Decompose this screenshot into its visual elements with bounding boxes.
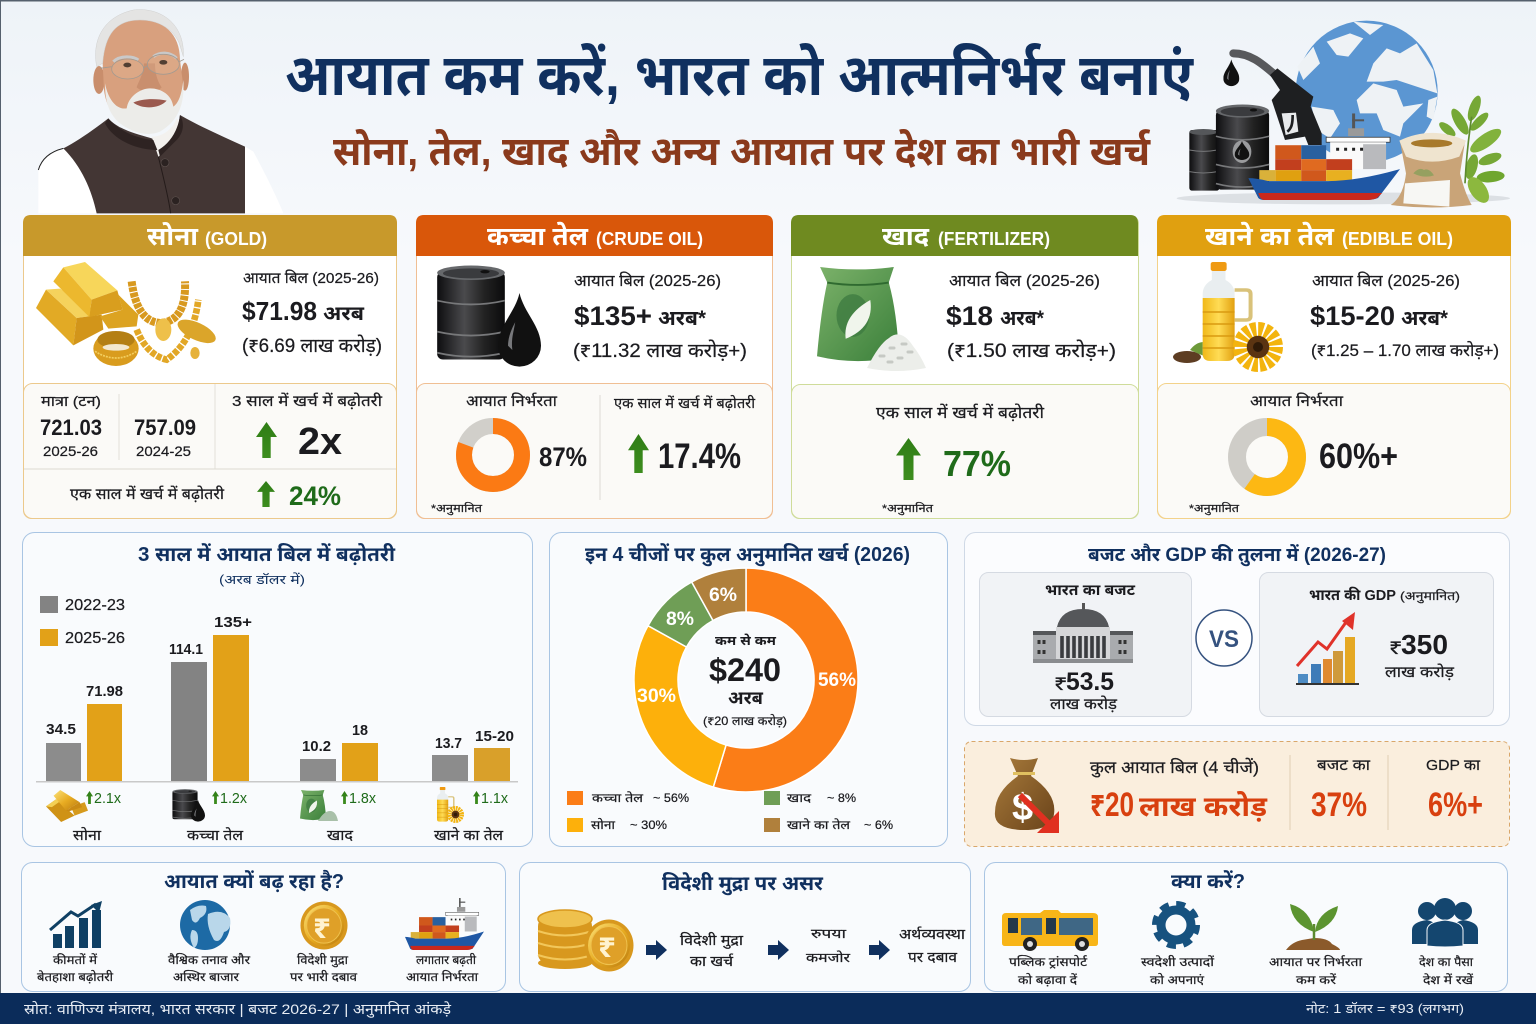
bar value labels: 15-20 [475, 728, 514, 745]
icon: money bag with down arrow: $ [1012, 787, 1033, 829]
panel: crude oil: कच्चा तेल [487, 221, 589, 251]
category names: खाद [327, 827, 354, 843]
budget box: भारत का बजट [1045, 582, 1136, 599]
panel: fertilizer: खाद [882, 221, 929, 251]
gold stats box: मात्रा (टन) [41, 393, 101, 409]
panel: gold [23, 215, 397, 518]
chart legend [40, 596, 125, 647]
action labels: को अपनाएं [1150, 972, 1204, 987]
edible stats box: आयात निर्भरता [1250, 392, 1344, 410]
donut percentages: 6% [709, 585, 737, 606]
panel: edible oil [1157, 215, 1511, 518]
reason labels: अस्थिर बाजार [173, 969, 240, 984]
chart: 60 percent donut [1237, 427, 1297, 487]
gold stats box: एक साल में खर्च में बढ़ोतरी [70, 485, 225, 503]
GDP box: भारत की GDP [1309, 586, 1396, 604]
panel: edible oil: खाने का तेल [1205, 221, 1335, 251]
import bill figures [946, 272, 1116, 362]
reason labels: बेतहाशा बढ़ोतरी [37, 969, 114, 984]
reason labels [37, 952, 479, 984]
chart legend: 2025-26 [65, 630, 125, 647]
reason labels: कीमतों में [53, 953, 98, 967]
growth multiples: 1.2x [220, 790, 247, 807]
action labels: आयात पर निर्भरता [1269, 954, 1363, 969]
VS badge: VS [1209, 626, 1239, 653]
chart legend: 2022-23 [65, 597, 125, 614]
budget box [980, 572, 1192, 716]
budget box: लाख करोड़ [1050, 696, 1118, 713]
import bill figures: आयात बिल (2025-26) [243, 270, 379, 287]
import bill figures: (₹1.25 – 1.70 लाख करोड़+) [1311, 340, 1499, 360]
crude stats box: आयात निर्भरता [466, 392, 558, 410]
donut center total: कम से कम [715, 633, 777, 648]
text: rupee weakens [806, 926, 851, 965]
text: rupee weakens: रुपया [811, 926, 847, 941]
panel: why imports are rising: आयात क्यों बढ़ रहा है? [164, 869, 344, 893]
donut legend: ~ 30% [630, 818, 667, 832]
panel: foreign currency impact: विदेशी मुद्रा पर असर [662, 871, 824, 896]
text: foreign exchange cost: विदेशी मुद्रा [680, 931, 743, 950]
panel: total import bill callout: 37% [1311, 786, 1367, 824]
panel: budget versus GDP [964, 532, 1510, 726]
bars [36, 635, 518, 782]
panel: crude oil: (CRUDE OIL) [596, 229, 703, 249]
header illustration: globe, fuel nozzle, barrels, ship, sack [1177, 21, 1510, 207]
icon: oil barrel and drop [437, 266, 541, 367]
import bill figures: आयात बिल (2025-26) [574, 272, 721, 290]
panel: 3 year bar chart [22, 532, 532, 846]
reason labels: आयात निर्भरता [406, 969, 479, 984]
import bill figures: $18 [946, 301, 993, 331]
donut percentages: 30% [637, 686, 676, 707]
gold stats box: 24% [289, 481, 341, 511]
panel: what to do [984, 862, 1508, 992]
edible stats box [1158, 384, 1510, 518]
panel: total import bill callout: बजट का [1317, 757, 1371, 774]
gold stats box [24, 384, 396, 518]
import bill figures [573, 272, 747, 362]
icon: coin stack: ₹ [598, 929, 616, 964]
GDP box: लाख करोड़ [1385, 664, 1455, 681]
fertilizer stats box: *अनुमानित [882, 502, 934, 515]
footer bar: स्रोत: वाणिज्य मंत्रालय, भारत सरकार | बजट 2026-27 | अनुमानित आंकड़े [24, 1000, 452, 1019]
icon: rupee coin [300, 901, 348, 950]
import bill figures: अरब* [1000, 307, 1045, 330]
action labels: पब्लिक ट्रांसपोर्ट [1009, 954, 1088, 969]
chart: 87 percent donut [464, 426, 522, 484]
donut center total: अरब [728, 688, 764, 708]
panel: budget versus GDP: बजट और GDP की तुलना में (2026-27) [1088, 543, 1386, 567]
panel: total import bill callout [964, 742, 1510, 846]
arrow [768, 940, 789, 960]
fertilizer stats box [792, 384, 1138, 518]
icon: fertilizer sack [817, 267, 926, 371]
action labels: कम करें [1296, 973, 1337, 987]
donut legend: ~ 56% [653, 791, 689, 805]
donut legend: खाने का तेल [787, 817, 851, 832]
icon: growth chart [1296, 612, 1359, 685]
gold stats box: 3 साल में खर्च में बढ़ोतरी [232, 392, 383, 410]
import bill figures: $15-20 [1310, 301, 1395, 331]
donut percentages: 8% [666, 609, 694, 630]
gold stats box: 757.09 [134, 415, 196, 440]
reason labels: पर भारी दबाव [290, 969, 357, 984]
bar value labels: 34.5 [46, 721, 76, 738]
icon: sprout [1286, 904, 1340, 950]
fertilizer stats box: 77% [943, 443, 1011, 484]
panel: total import bill callout: लाख करोड़ [1139, 790, 1268, 822]
category names: सोना [73, 827, 101, 843]
GDP box [1260, 572, 1494, 716]
GDP box: 350 [1401, 629, 1448, 660]
donut percentages: 56% [818, 670, 856, 691]
reason labels: विदेशी मुद्रा [297, 952, 349, 968]
panel: total import bill callout: ₹20 [1090, 786, 1134, 824]
gold stats box: 2024-25 [136, 443, 191, 459]
crude stats box: 87% [539, 442, 587, 472]
import bill figures [1310, 272, 1499, 360]
panel: fertilizer: (FERTILIZER) [938, 229, 1050, 249]
text: foreign exchange cost: का खर्च [690, 953, 734, 969]
GDP box: (अनुमानित) [1400, 588, 1460, 604]
footer bar: नोट: 1 डॉलर = ₹93 (लगभग) [1306, 1001, 1464, 1016]
icon: people [1412, 898, 1478, 947]
panel: 3 year bar chart: (अरब डॉलर में) [219, 572, 305, 587]
import bill figures: अरब* [658, 307, 707, 330]
donut center total [703, 633, 787, 728]
bar value labels: 10.2 [302, 738, 331, 755]
import bill figures: अरब [323, 303, 365, 325]
chart: spend donut [634, 568, 858, 792]
reason labels: वैश्विक तनाव और [168, 952, 251, 967]
panel: gold: (GOLD) [205, 229, 267, 249]
icon: gear [1155, 904, 1197, 946]
VS badge [1196, 610, 1252, 666]
panel: crude oil [416, 215, 773, 518]
donut center total: (₹20 लाख करोड़) [703, 713, 787, 728]
bar value labels: 135+ [214, 614, 252, 631]
text: foreign exchange cost [680, 931, 743, 969]
crude stats box: *अनुमानित [431, 502, 483, 515]
reason labels: लगातार बढ़ती [416, 952, 477, 967]
import bill figures: (₹1.50 लाख करोड़+) [947, 340, 1116, 362]
arrow [869, 940, 890, 960]
panel: total spend donut [550, 532, 948, 846]
growth multiples: 1.1x [481, 790, 508, 807]
action labels: को बढ़ावा दें [1018, 972, 1078, 987]
donut legend: खाद [787, 791, 812, 805]
import bill figures: आयात बिल (2025-26) [949, 272, 1100, 290]
fertilizer stats box: एक साल में खर्च में बढ़ोतरी [876, 403, 1045, 422]
panel: edible oil: (EDIBLE OIL) [1342, 229, 1453, 249]
import bill figures: $135+ [574, 301, 652, 331]
icon: oil bottle and sunflower [1173, 262, 1276, 364]
category names: कच्चा तेल [187, 826, 244, 843]
import bill figures [242, 270, 382, 357]
category icons [46, 787, 461, 822]
gold stats box: 2x [298, 421, 342, 463]
crude stats box [416, 384, 772, 518]
icon: cargo ship [405, 898, 484, 950]
panel: fertilizer [791, 215, 1138, 518]
category names [73, 826, 504, 843]
action labels: देश का पैसा [1419, 954, 1474, 969]
icon: rising chart [50, 901, 102, 948]
category names: खाने का तेल [434, 826, 504, 843]
import bill figures: आयात बिल (2025-26) [1312, 272, 1460, 290]
donut legend [567, 790, 893, 832]
bar value labels: 114.1 [169, 641, 203, 658]
donut legend: ~ 8% [827, 791, 856, 805]
crude stats box: एक साल में खर्च में बढ़ोतरी [614, 395, 755, 411]
icon: money bag with down arrow [995, 758, 1059, 833]
growth multiples: 1.8x [349, 790, 376, 807]
GDP box: ₹ [1389, 637, 1402, 659]
action labels [1009, 954, 1474, 987]
panel: why imports are rising [22, 862, 506, 992]
import bill figures: $71.98 [242, 296, 317, 326]
edible stats box: *अनुमानित [1189, 502, 1240, 515]
footer bar [0, 993, 1536, 1024]
panel: total spend donut: इन 4 चीजों पर कुल अनुमानित खर्च (2026) [585, 542, 910, 567]
panel: foreign currency impact [520, 862, 970, 992]
panel: total import bill callout: कुल आयात बिल (4 चीजें) [1090, 757, 1259, 779]
icon: bus [1002, 910, 1098, 951]
header portrait illustration [38, 10, 283, 213]
bar value labels: 18 [352, 722, 368, 739]
crude stats box: 17.4% [658, 437, 741, 476]
icon: globe [180, 900, 230, 950]
edible stats box: 60%+ [1319, 437, 1398, 476]
panel: total import bill callout: 6%+ [1428, 786, 1483, 824]
import bill figures: (₹11.32 लाख करोड़+) [573, 340, 747, 362]
growth multiples [86, 790, 508, 807]
arrow [646, 940, 667, 960]
panel: total import bill callout: GDP का [1426, 757, 1481, 774]
donut center total: $240 [709, 652, 781, 688]
panel: 3 year bar chart: 3 साल में आयात बिल में बढ़ोतरी [138, 542, 396, 566]
icon: parliament building [1033, 603, 1133, 663]
icon: gold bars and jewellery [36, 262, 219, 366]
bar value labels [46, 614, 514, 755]
subtitle: सोना, तेल, खाद और अन्य आयात पर देश का भारी खर्च [333, 129, 1151, 174]
action labels: स्वदेशी उत्पादों [1141, 954, 1215, 969]
import bill figures: (₹6.69 लाख करोड़) [242, 335, 382, 357]
main title: आयात कम करें, भारत को आत्मनिर्भर बनाएं [285, 43, 1195, 108]
action labels: देश में रखें [1423, 972, 1473, 987]
gold stats box: 721.03 [40, 415, 102, 440]
icon: coin stack [538, 910, 634, 971]
donut legend: ~ 6% [864, 818, 893, 832]
text: rupee weakens: कमजोर [806, 950, 851, 965]
panel: what to do: क्या करें? [1171, 870, 1245, 893]
growth multiples: 2.1x [94, 790, 121, 807]
donut legend: कच्चा तेल [592, 790, 644, 805]
gold stats box: 2025-26 [43, 443, 98, 459]
bar value labels: 71.98 [86, 683, 123, 700]
text: pressure on economy: पर दबाव [908, 949, 957, 965]
bar value labels: 13.7 [435, 735, 462, 752]
text: pressure on economy [899, 926, 965, 965]
text: pressure on economy: अर्थव्यवस्था [899, 926, 965, 942]
budget box: 53.5 [1066, 668, 1114, 696]
icon: rupee coin: ₹ [313, 910, 331, 945]
budget box: ₹ [1054, 673, 1067, 695]
panel: gold: सोना [147, 221, 199, 251]
import bill figures: अरब* [1401, 307, 1449, 330]
donut percentages [637, 585, 856, 707]
donut legend: सोना [591, 817, 616, 832]
